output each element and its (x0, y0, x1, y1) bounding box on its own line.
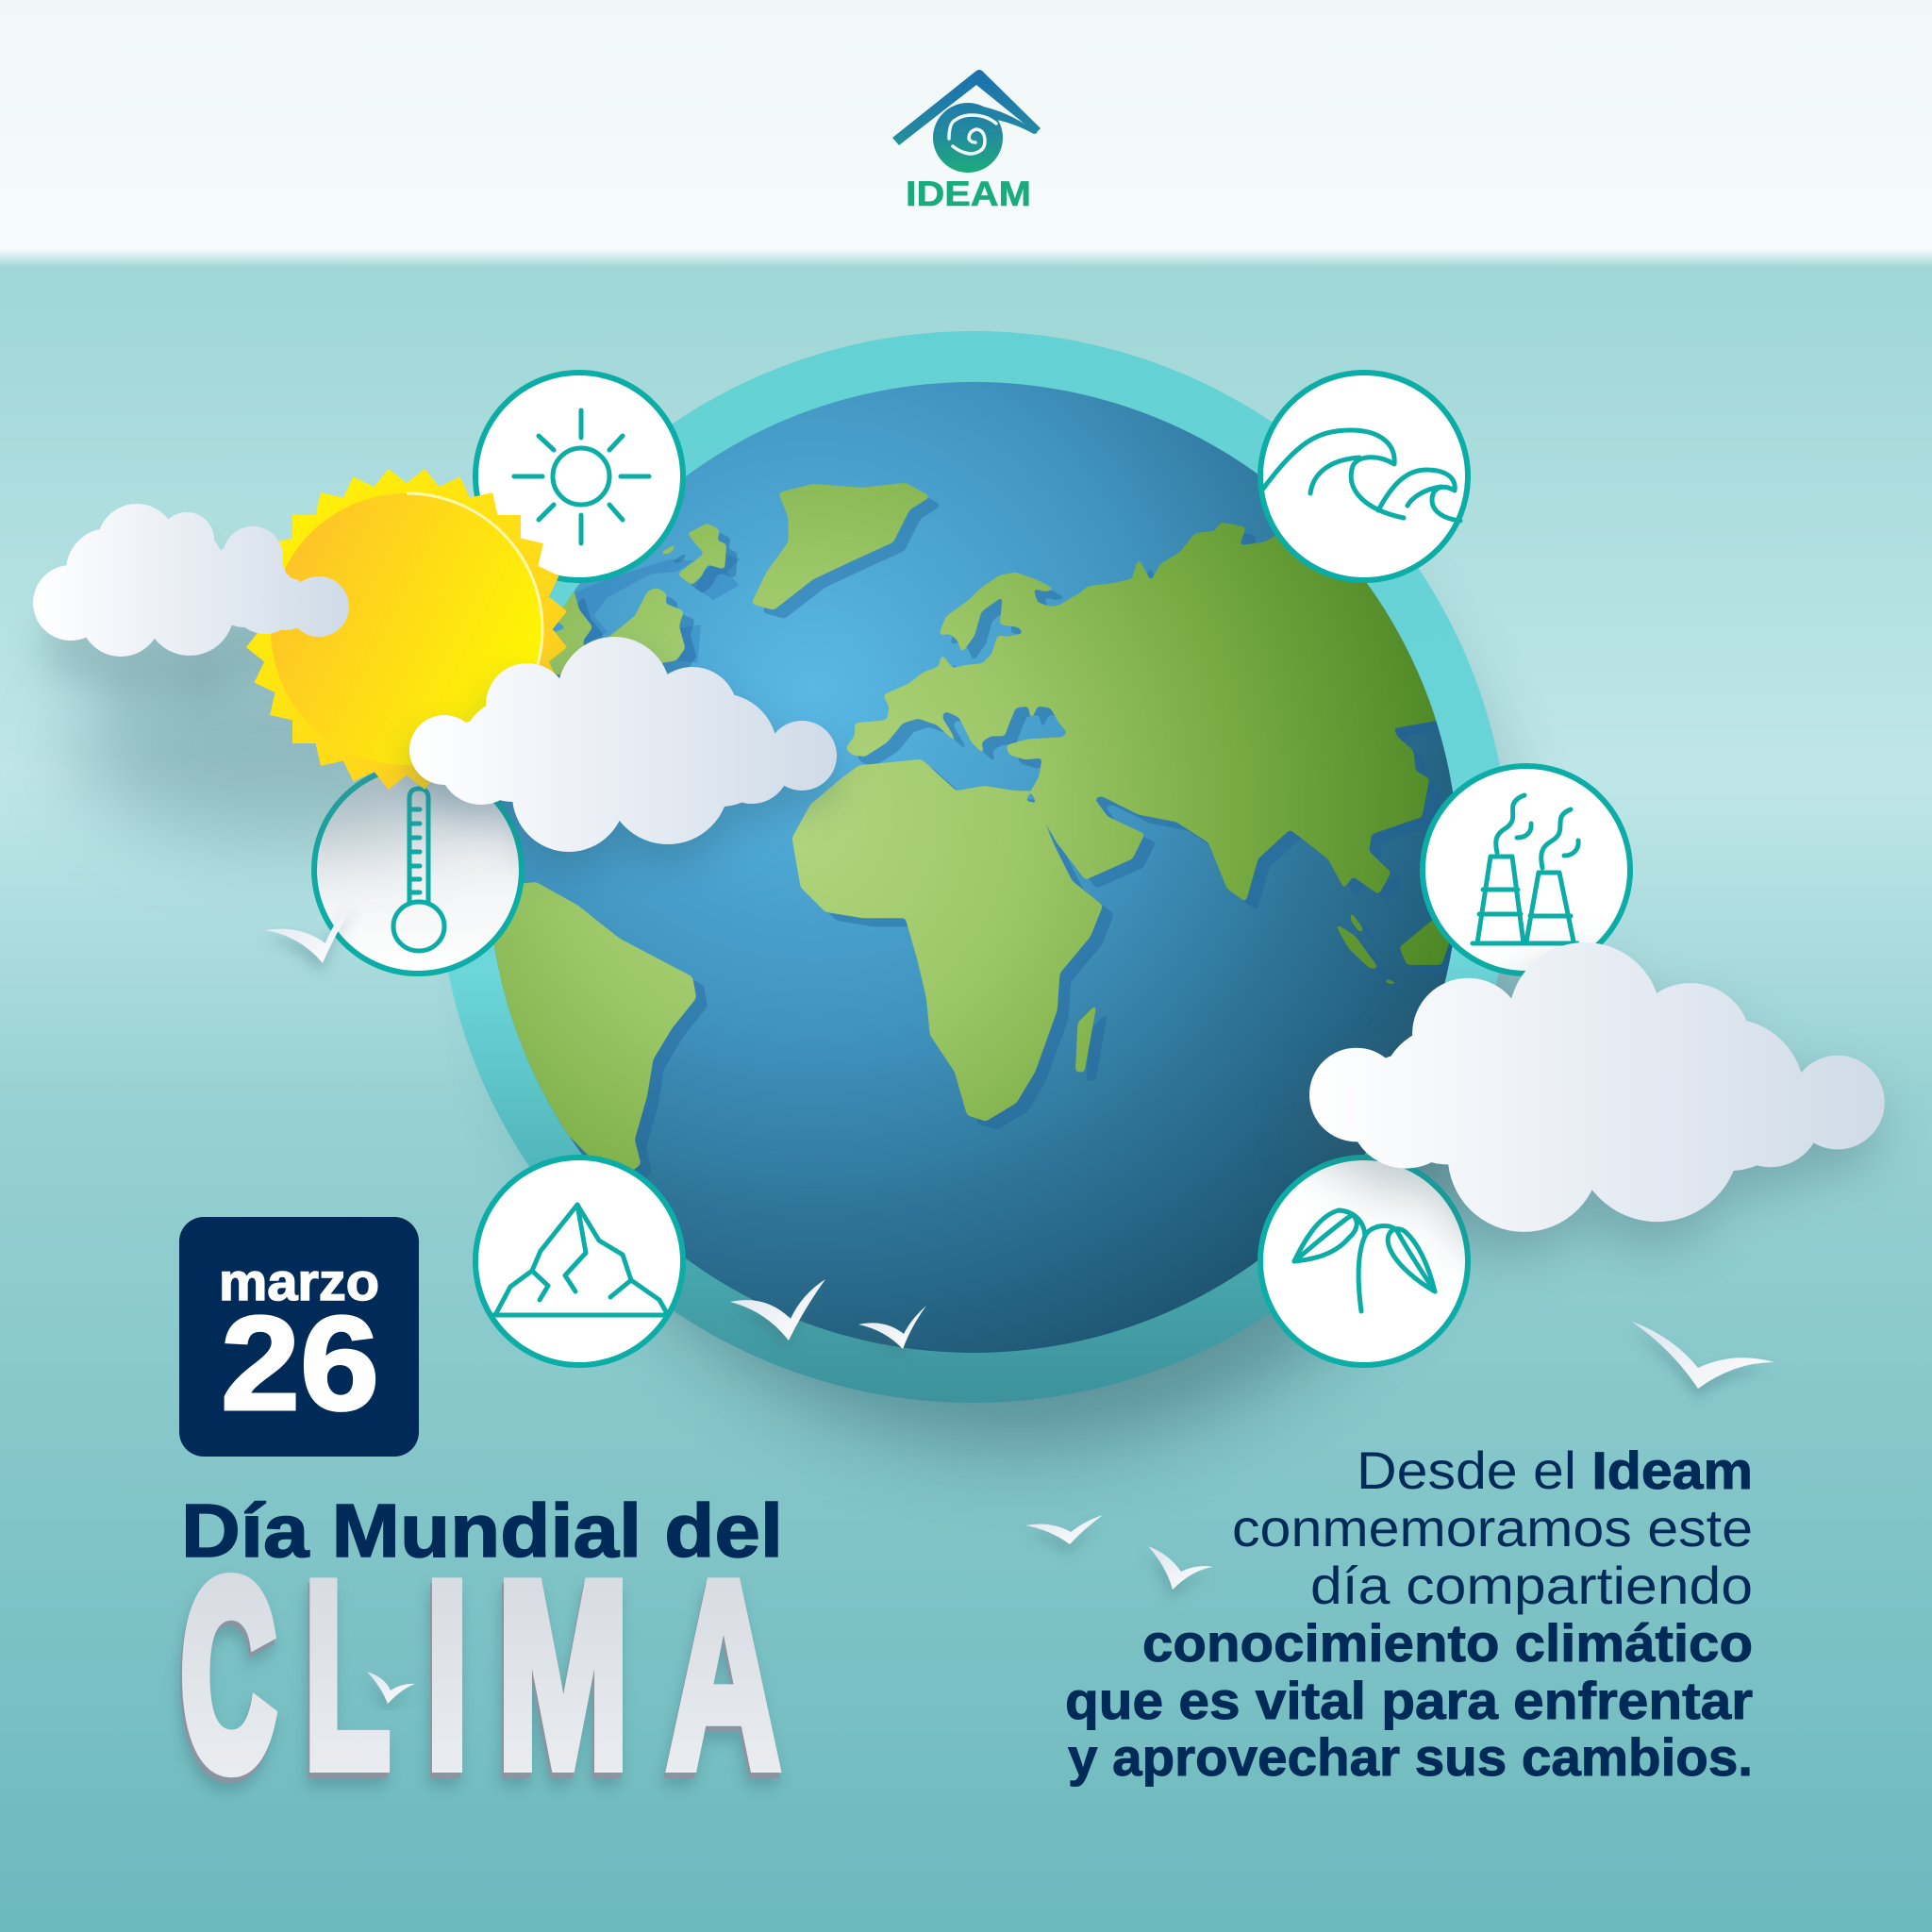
icon: mountain (475, 1158, 683, 1365)
logo swirl (933, 103, 1038, 173)
icon: thermometer (314, 766, 522, 974)
cloud: middle (409, 637, 837, 871)
date month: marzo (219, 1252, 379, 1311)
logo roof (892, 70, 1041, 145)
icon: sun (475, 373, 683, 580)
face letters: I (425, 1528, 469, 1823)
logo: IDEAM (892, 70, 1041, 213)
sun illustration (246, 469, 567, 790)
bird 1 (265, 899, 358, 963)
bird 5 (1025, 1515, 1103, 1544)
bird 2 (730, 1279, 825, 1341)
heading: Día Mundial del: Día Mundial del (181, 1489, 783, 1573)
icon: factory (1423, 766, 1630, 974)
face letters: C (181, 1528, 275, 1823)
top header band (0, 0, 1932, 268)
shadow letters: M (495, 1534, 627, 1828)
shadow letters: I (424, 1534, 467, 1828)
extra coastal shadows (573, 551, 741, 663)
bird 3 (858, 1306, 926, 1349)
continents land (492, 483, 1478, 1183)
date day: 26 (221, 1289, 379, 1439)
bird 4 (1632, 1322, 1774, 1389)
bird 7 (367, 1672, 415, 1704)
bird 6 (1148, 1546, 1213, 1590)
globe halo ring (438, 331, 1509, 1403)
halo shadow (524, 458, 1514, 1448)
face letters: A (667, 1528, 780, 1823)
continents (492, 483, 1490, 1191)
shadow letters (179, 1534, 778, 1828)
text block: message: conocimiento climático (1142, 1613, 1753, 1673)
birds (265, 899, 1774, 1590)
text block: message: Desde el Ideam (1357, 1441, 1753, 1500)
shadow letters: A (665, 1534, 778, 1828)
sun disc (271, 493, 542, 765)
face letters (181, 1528, 780, 1823)
text block: message: y aprovechar sus cambios. (1068, 1727, 1753, 1787)
continent shadows (557, 498, 1453, 1177)
sun and left cloud shadow (42, 546, 491, 840)
icon: plant (1260, 1158, 1468, 1365)
text block: message: día compartiendo (1310, 1556, 1753, 1615)
logo wordmark: IDEAM (906, 175, 1031, 213)
heading: CLIMA (179, 1528, 780, 1828)
face letters: M (497, 1528, 629, 1823)
text block: message: conmemoramos este (1232, 1498, 1753, 1557)
globe (488, 382, 1490, 1353)
cloud: left (33, 504, 349, 657)
shadow letters: L (302, 1534, 389, 1828)
globe ocean (488, 382, 1458, 1353)
text block: message: que es vital para enfrentar (1065, 1671, 1753, 1730)
date badge (179, 1217, 419, 1457)
sun rays (246, 469, 567, 790)
face letters: L (304, 1528, 391, 1823)
cloud: right (1302, 942, 1885, 1257)
icon: waves (1260, 373, 1468, 580)
shadow letters: C (179, 1534, 274, 1828)
text block: message (1065, 1441, 1753, 1787)
